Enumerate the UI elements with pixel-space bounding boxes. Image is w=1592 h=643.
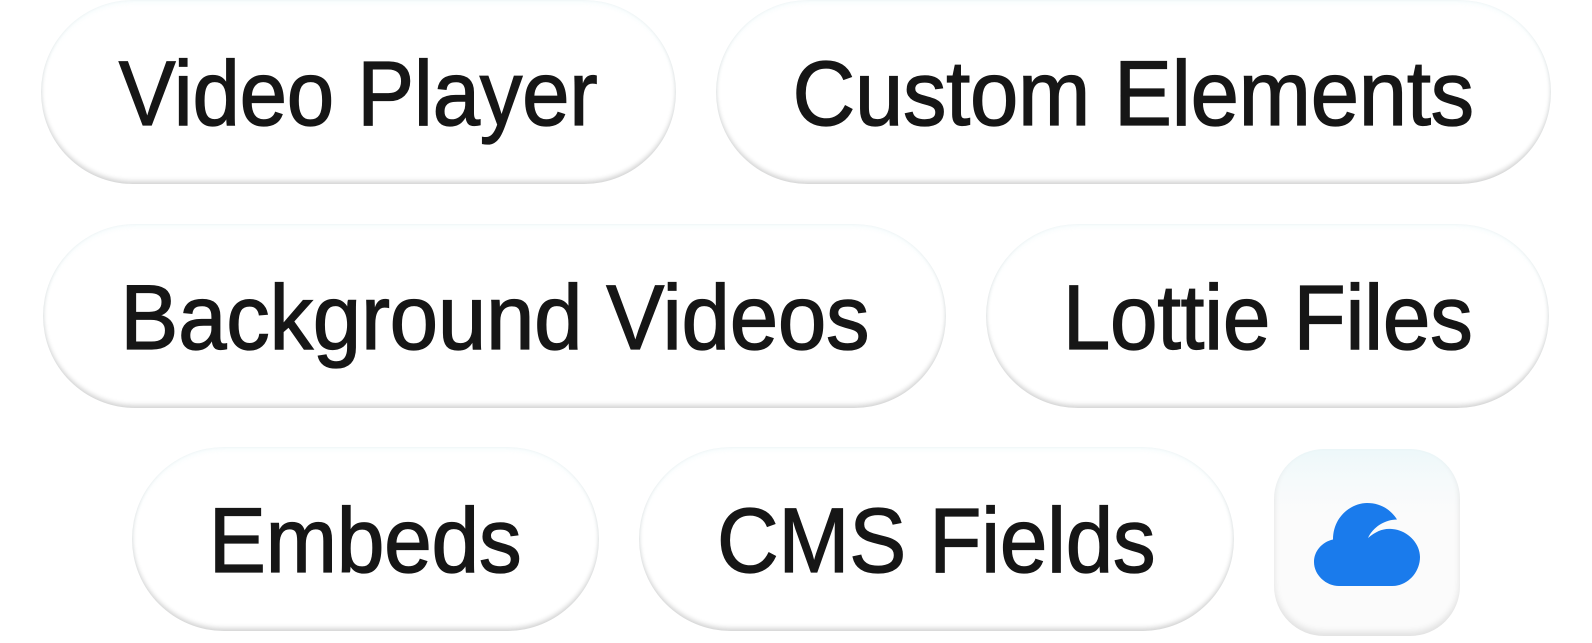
icon: blue cloud (1314, 503, 1420, 586)
pill: CMS Fields (639, 447, 1234, 631)
pill: Background Videos (43, 224, 946, 408)
pill: Video Player: Video Player (119, 42, 598, 144)
pill: Embeds (132, 447, 599, 631)
pill: Video Player (41, 0, 676, 184)
icon tile: cloud (1274, 449, 1460, 636)
pill: Lottie Files: Lottie Files (1063, 266, 1472, 368)
pill: Custom Elements: Custom Elements (793, 42, 1474, 144)
pill: Background Videos: Background Videos (120, 266, 869, 368)
pill: Custom Elements (716, 0, 1551, 184)
pill: Embeds: Embeds (209, 490, 522, 592)
pill: CMS Fields: CMS Fields (717, 490, 1156, 592)
pill: Lottie Files (986, 224, 1549, 408)
